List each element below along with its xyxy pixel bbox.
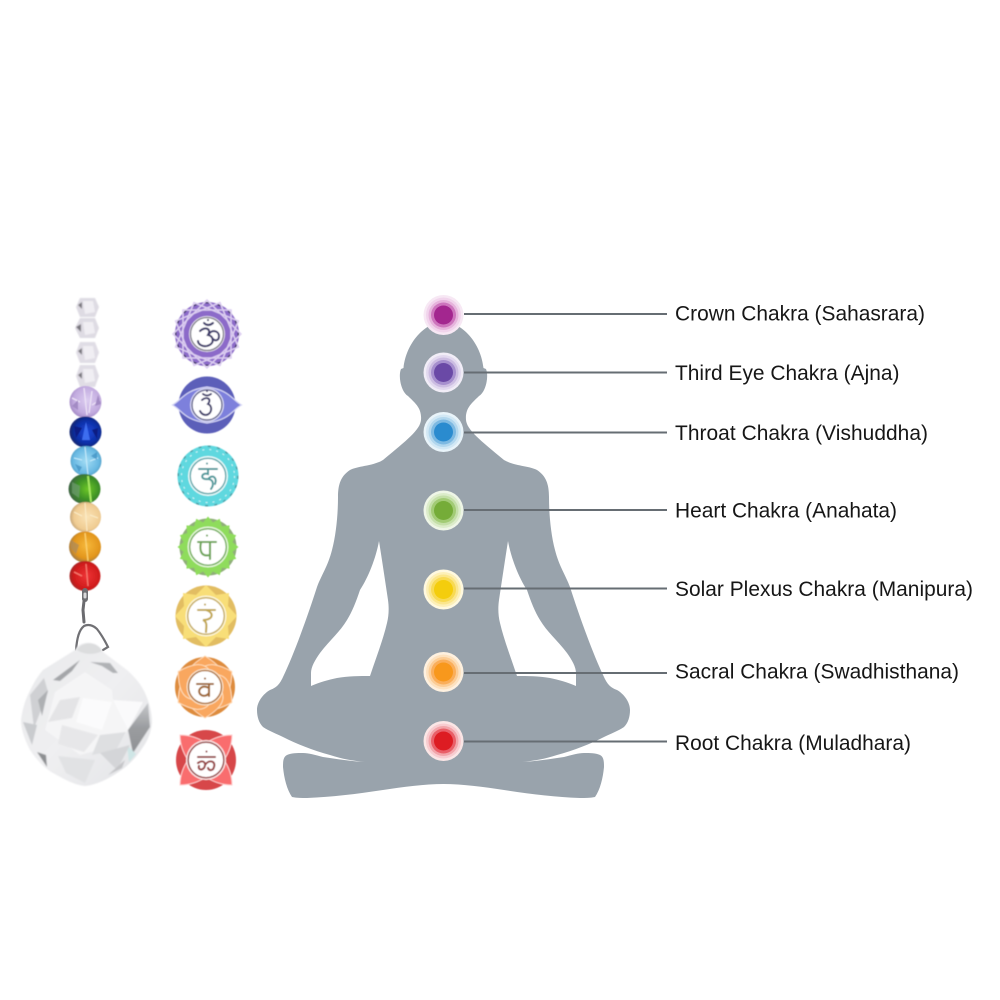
label: throat chakra: Throat Chakra (Vishuddha) [675,422,928,445]
chakra point: root [424,721,464,761]
chakra point: heart [424,490,464,530]
symbol: yam [198,536,216,559]
clear beads [75,298,99,387]
chakra point: solar plexus [424,570,464,610]
symbol: vam [197,678,213,696]
label: heart chakra: Heart Chakra (Anahata) [675,500,897,522]
chakra point: crown [424,295,464,335]
label: third eye chakra: Third Eye Chakra (Ajna) [675,362,900,385]
label: root chakra: Root Chakra (Muladhara) [675,732,911,755]
meditating figure silhouette [257,322,630,798]
icon: crown chakra mandala [173,300,241,368]
pendant: crystal bead strand with faceted ball [21,298,152,786]
chakra point: sacral [424,652,464,692]
colored beads [68,386,102,591]
metal clasp and hook [76,591,108,650]
icon: heart chakra mandala [178,516,238,578]
label: solar plexus chakra: Solar Plexus Chakra (Manipura) [675,578,973,601]
chakra point: third eye [424,352,464,392]
label: crown chakra: Crown Chakra (Sahasrara) [675,302,925,326]
symbol: lam [198,752,215,770]
icon: root chakra mandala [176,730,236,790]
faceted crystal ball [21,643,152,786]
chakra point: throat [424,412,464,452]
icon: third eye chakra mandala [172,376,242,434]
symbol: ham [199,464,217,489]
connector lines [464,314,667,742]
label: sacral chakra: Sacral Chakra (Swadhisthana) [675,660,959,684]
symbol: ram [198,604,215,632]
icon: throat chakra mandala [178,446,238,506]
symbol: aum [200,391,211,415]
icon: solar plexus chakra mandala [175,585,237,647]
symbol: om [198,320,219,346]
icon: sacral chakra mandala [169,656,241,718]
